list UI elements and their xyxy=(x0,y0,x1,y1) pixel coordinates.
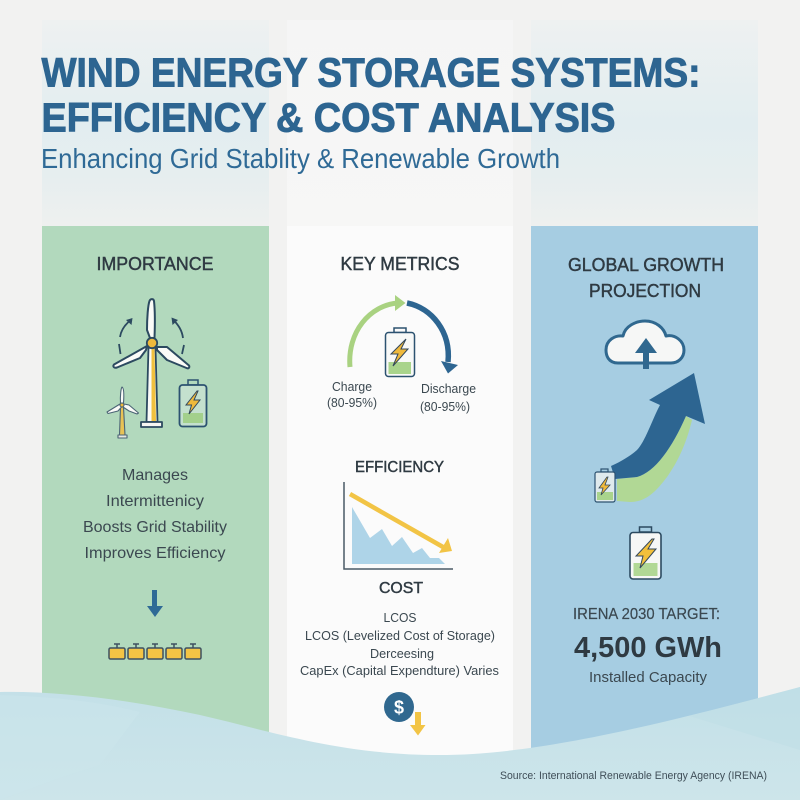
chart: declining cost xyxy=(344,482,453,569)
text: importance list: Intermittenicy xyxy=(106,493,204,510)
title: EFFICIENCY & COST ANALYSIS xyxy=(42,94,616,140)
heading: key metrics: KEY METRICS xyxy=(340,254,460,274)
text: importance list xyxy=(83,467,227,562)
label: charge: (80-95%) xyxy=(327,396,377,410)
text: cost list: LCOS xyxy=(384,611,416,625)
header backdrop xyxy=(42,20,758,226)
label: discharge xyxy=(420,382,476,414)
label: charge xyxy=(327,380,377,410)
heading: efficiency: EFFICIENCY xyxy=(355,459,444,476)
icon: battery xyxy=(386,328,414,376)
icon: battery xyxy=(180,380,206,426)
heading: global growth projection: GLOBAL GROWTH xyxy=(568,255,724,275)
icon: down arrow xyxy=(147,590,163,617)
icon: battery bank xyxy=(109,644,201,659)
panel: importance xyxy=(42,226,269,736)
heading: importance: IMPORTANCE xyxy=(96,254,214,274)
subtitle: Enhancing Grid Stablity & Renewable Growth xyxy=(41,143,560,174)
bottom wave xyxy=(0,687,800,800)
source note: Source: International Renewable Energy Agency (IRENA) xyxy=(500,770,767,782)
label: discharge: Discharge xyxy=(421,382,476,396)
icon: dollar with down arrow: $ xyxy=(394,698,404,718)
text: cost list: Derceesing xyxy=(370,647,434,661)
stat: 4,500 gwh: 4,500 GWh xyxy=(574,632,722,664)
text: cost list: LCOS (Levelized Cost of Storage) xyxy=(305,629,495,643)
text: importance list: Improves Efficiency xyxy=(84,545,226,562)
panel: key metrics xyxy=(287,226,513,758)
icon: battery xyxy=(630,527,661,579)
text: importance list: Manages xyxy=(122,467,188,484)
heading: global growth projection xyxy=(568,255,724,301)
text: importance list: Boosts Grid Stability xyxy=(83,519,227,536)
chart: growth arrow xyxy=(611,373,705,502)
heading: cost: COST xyxy=(379,580,423,597)
icon: discharge arrow xyxy=(407,303,458,374)
icon: cloud upload xyxy=(606,321,684,369)
text: cost list xyxy=(300,611,499,678)
title xyxy=(42,50,700,140)
icon: rotation arrows xyxy=(119,318,184,354)
heading: global growth projection: PROJECTION xyxy=(589,281,701,301)
icon: charge arrow xyxy=(350,295,406,367)
text: cost list: CapEx (Capital Expendture) Varies xyxy=(300,664,499,678)
icon: small wind turbine xyxy=(107,387,138,438)
icon: small battery xyxy=(595,469,615,502)
label: discharge: (80-95%) xyxy=(420,400,470,414)
title: WIND ENERGY STORAGE SYSTEMS: xyxy=(42,50,700,96)
label: charge: Charge xyxy=(332,380,372,394)
text: installed capacity: Installed Capacity xyxy=(589,670,708,686)
text: irena target: IRENA 2030 TARGET: xyxy=(573,606,720,623)
panel: global growth projection xyxy=(531,226,758,751)
icon: large wind turbine xyxy=(113,299,189,427)
icon: dollar with down arrow xyxy=(384,692,426,736)
